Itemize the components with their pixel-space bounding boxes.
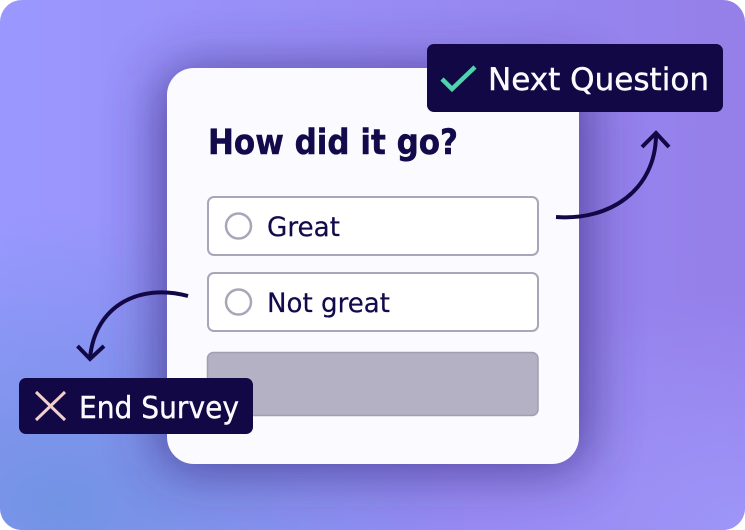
badge: Next Question: Next Question [488, 62, 709, 98]
badge: Next Question [427, 44, 723, 112]
icon: cross mark [36, 392, 65, 420]
option: Not great: Not great [267, 288, 390, 319]
icon: check mark [442, 67, 475, 89]
badge: End Survey [19, 378, 253, 434]
arrow: to Next Question [556, 133, 669, 217]
option: Not great [208, 273, 538, 331]
option: Great: Great [267, 212, 340, 243]
heading: How did it go? [208, 123, 458, 163]
disabled button [208, 352, 538, 416]
option: Great [208, 197, 538, 255]
panel: survey card [167, 68, 579, 464]
arrow: to End Survey [78, 292, 188, 359]
badge: End Survey: End Survey [79, 391, 239, 426]
